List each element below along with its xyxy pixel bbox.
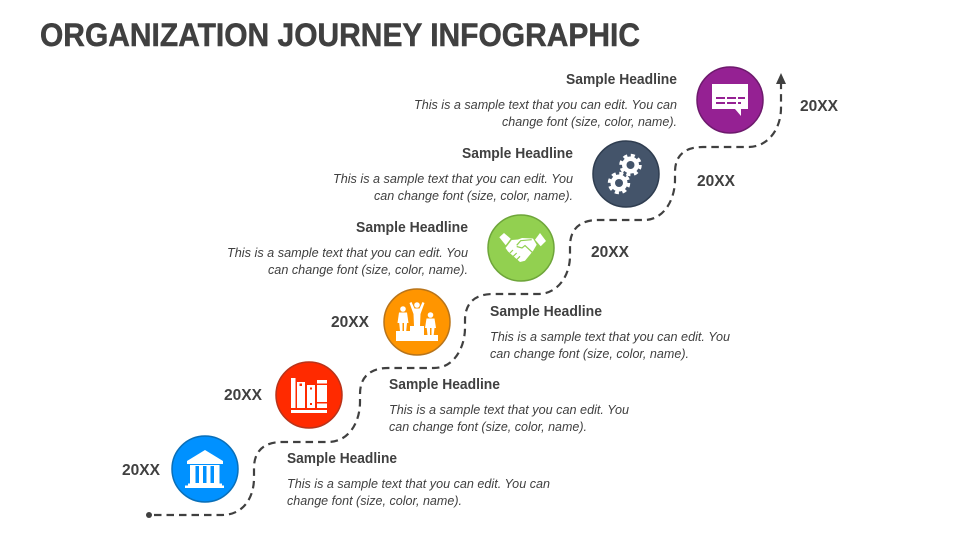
step 5: year label: 20XX	[697, 173, 736, 190]
step 4: text block: This is a sample text that you can edit. You	[227, 246, 468, 260]
step 1: circle with bank icon	[172, 436, 238, 502]
step 1: text block: change font (size, color, name).	[287, 494, 462, 508]
step 2: text block	[389, 377, 629, 434]
step 1: text block	[287, 451, 550, 508]
step 1: text block: This is a sample text that you can edit. You can	[287, 477, 550, 491]
step 3: year label: 20XX	[331, 314, 370, 331]
step 6: text block: This is a sample text that you can edit. You can	[414, 98, 677, 112]
step 3: text block	[490, 304, 730, 361]
step 3: text block: can change font (size, color, name).	[490, 347, 689, 361]
step 2: text block: can change font (size, color, name).	[389, 420, 587, 434]
step 5: text block	[333, 146, 573, 203]
step 4: text block	[227, 220, 468, 277]
step 4: text block: can change font (size, color, name).	[268, 263, 468, 277]
step 2: year label: 20XX	[224, 387, 263, 404]
step 2: text block: Sample Headline	[389, 377, 500, 393]
dashed journey path with arrow	[146, 73, 786, 518]
step 4: year label: 20XX	[591, 244, 630, 261]
step 1: text block: Sample Headline	[287, 451, 397, 467]
step 5: circle with gears icon	[593, 141, 659, 207]
title: ORGANIZATION JOURNEY INFOGRAPHIC	[40, 17, 640, 53]
step 1: year label: 20XX	[122, 462, 161, 479]
step 4: circle with handshake icon	[488, 215, 554, 281]
step 3: text block: This is a sample text that you can edit. You	[490, 330, 730, 344]
step 6: text block	[414, 72, 677, 129]
step 5: text block: This is a sample text that you can edit. You	[333, 172, 573, 186]
step 4: text block: Sample Headline	[356, 220, 468, 236]
step 5: text block: Sample Headline	[462, 146, 573, 162]
step 6: year label: 20XX	[800, 98, 839, 115]
step 3: text block: Sample Headline	[490, 304, 602, 320]
step 5: text block: can change font (size, color, name).	[374, 189, 573, 203]
step 2: text block: This is a sample text that you can edit. You	[389, 403, 629, 417]
step 2: circle with books icon	[276, 362, 342, 428]
step 3: circle with podium icon	[384, 289, 450, 355]
step 6: text block: Sample Headline	[566, 72, 677, 88]
step 6: circle with chat icon	[697, 67, 763, 133]
step 6: text block: change font (size, color, name).	[502, 115, 677, 129]
